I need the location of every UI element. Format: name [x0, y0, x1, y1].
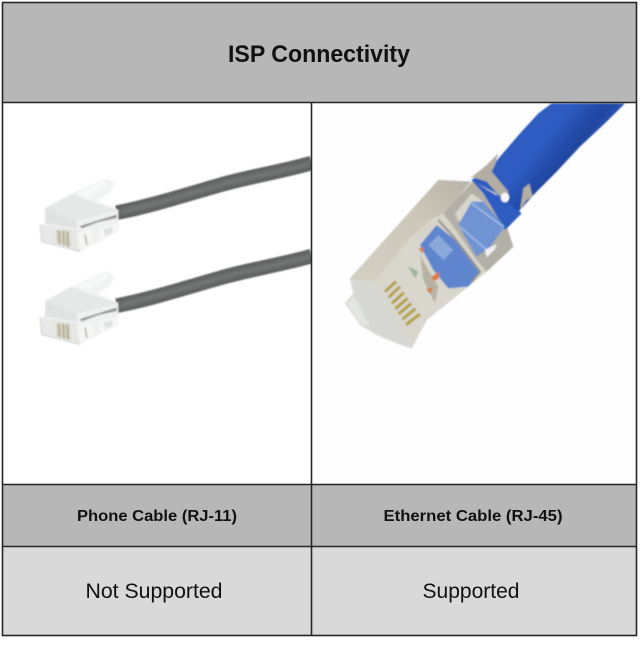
- panel: phone cable image: [3, 103, 312, 484]
- cable jacket: [470, 103, 625, 230]
- panel: ethernet cable status: [312, 547, 636, 635]
- panel: ethernet cable label: [312, 485, 636, 546]
- connector: [345, 180, 522, 348]
- label: ethernet cable: Ethernet Cable (RJ-45): [384, 508, 562, 525]
- label: phone cable: Phone Cable (RJ-11): [77, 508, 237, 525]
- icon: upper RJ-11 phone cable: [40, 163, 312, 252]
- panel: phone cable label: [3, 485, 311, 546]
- panel: title header: [3, 3, 636, 102]
- text: supported: Supported: [422, 579, 520, 603]
- icon: lower RJ-11 phone cable: [40, 256, 312, 345]
- text: not supported: Not Supported: [86, 579, 222, 603]
- panel: ethernet cable image: [312, 103, 636, 484]
- title: ISP Connectivity: [228, 41, 411, 68]
- icon: blue RJ-45 ethernet cable: [345, 103, 625, 348]
- panel: phone cable status: [3, 547, 311, 635]
